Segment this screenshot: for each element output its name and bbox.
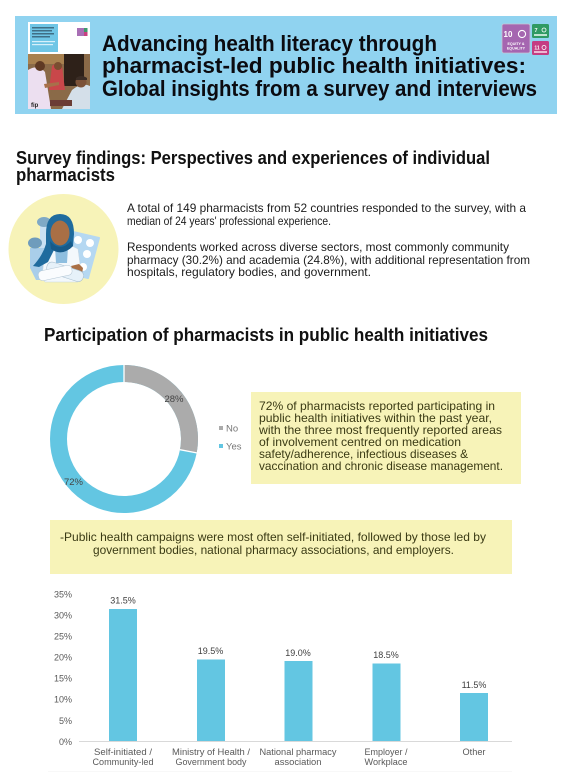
callout: 72% participation bbox=[251, 392, 521, 484]
value labels: 19.5% bbox=[198, 646, 223, 656]
callout: campaign leadership bbox=[50, 520, 512, 574]
report cover thumbnail: fip bbox=[31, 103, 39, 109]
category labels: Self-initiated / bbox=[94, 747, 153, 757]
y axis labels: 35% bbox=[54, 590, 72, 600]
SDG badges: 11 bbox=[534, 46, 540, 52]
category labels bbox=[92, 747, 486, 767]
title: pharmacist-led public health initiatives: bbox=[102, 53, 526, 78]
title: Advancing health literacy through bbox=[102, 31, 437, 56]
icon: pharmacist illustration bbox=[8, 194, 118, 304]
y axis labels bbox=[54, 590, 72, 747]
donut legend bbox=[219, 424, 242, 452]
title: Global insights from a survey and interviews bbox=[102, 76, 537, 101]
SDG badges: EQUALITY bbox=[507, 46, 526, 50]
value labels: 18.5% bbox=[373, 650, 399, 660]
title bbox=[102, 31, 537, 101]
text block: survey respondents: median of 24 years' professional experience. bbox=[127, 215, 331, 228]
y axis labels: 10% bbox=[54, 694, 72, 704]
y axis labels: 5% bbox=[59, 716, 72, 726]
heading: participation: Participation of pharmacists in public health initiatives bbox=[44, 324, 488, 345]
y axis labels: 30% bbox=[54, 610, 72, 620]
section heading: survey findings bbox=[16, 148, 490, 185]
category labels: Workplace bbox=[364, 757, 408, 767]
y axis labels: 25% bbox=[54, 632, 72, 642]
callout: 72% participation: public health initiatives within the past year, bbox=[259, 412, 492, 425]
section heading: survey findings: Survey findings: Perspectives and experiences of individual bbox=[16, 148, 490, 168]
SDG badges: 10 bbox=[504, 30, 513, 39]
text block: survey respondents: hospitals, regulatory bodies, and government. bbox=[127, 266, 371, 279]
text block: survey respondents: Respondents worked across diverse sectors, most commonly community bbox=[127, 241, 509, 254]
category labels: Government body bbox=[176, 757, 247, 767]
value labels: 11.5% bbox=[462, 680, 486, 690]
callout: 72% participation: vaccination and chronic disease management. bbox=[259, 460, 503, 473]
value labels bbox=[110, 596, 486, 690]
donut legend: No bbox=[226, 424, 238, 434]
donut chart: participation bbox=[58, 364, 198, 504]
text block: survey respondents: A total of 149 pharmacists from 52 countries responded to the survey, with a bbox=[127, 202, 527, 215]
category labels: Ministry of Health / bbox=[172, 747, 251, 757]
category labels: Employer / bbox=[364, 747, 408, 757]
y axis labels: 15% bbox=[54, 674, 72, 684]
section heading: survey findings: pharmacists bbox=[16, 165, 115, 185]
donut legend: Yes bbox=[226, 442, 242, 452]
SDG badges bbox=[502, 24, 549, 55]
report cover thumbnail bbox=[28, 22, 90, 109]
callout: campaign leadership: government bodies, national pharmacy associations, and employers. bbox=[93, 544, 454, 557]
SDG badges: EQUITY & bbox=[508, 42, 525, 46]
header banner bbox=[15, 16, 557, 114]
text block: survey respondents bbox=[127, 202, 530, 279]
callout: 72% participation: with the three most frequently reported areas bbox=[258, 424, 502, 437]
bar chart: campaign initiators bbox=[48, 590, 512, 772]
bars bbox=[109, 609, 488, 741]
category labels: Other bbox=[462, 747, 486, 757]
y axis labels: 20% bbox=[54, 652, 72, 662]
value labels: 19.0% bbox=[285, 648, 311, 658]
callout: 72% participation: 72% of pharmacists reported participating in bbox=[259, 400, 495, 413]
callout: campaign leadership: -Public health campaigns were most often self-initiated, followed by those led by bbox=[60, 531, 486, 544]
category labels: Community-led bbox=[92, 757, 154, 767]
donut chart: participation: 28% bbox=[164, 394, 184, 405]
category labels: association bbox=[274, 757, 322, 767]
SDG badges: 7 bbox=[534, 28, 538, 34]
callout: 72% participation: safety/adherence, infectious diseases & bbox=[259, 448, 468, 461]
category labels: National pharmacy bbox=[260, 747, 337, 757]
y axis labels: 0% bbox=[59, 737, 72, 747]
donut chart: participation: 72% bbox=[64, 477, 84, 488]
text block: survey respondents: pharmacy (30.2%) and academia (24.8%), with additional representation from bbox=[127, 254, 530, 267]
value labels: 31.5% bbox=[110, 596, 136, 606]
callout: 72% participation: of involvement centred on medication bbox=[259, 436, 461, 449]
